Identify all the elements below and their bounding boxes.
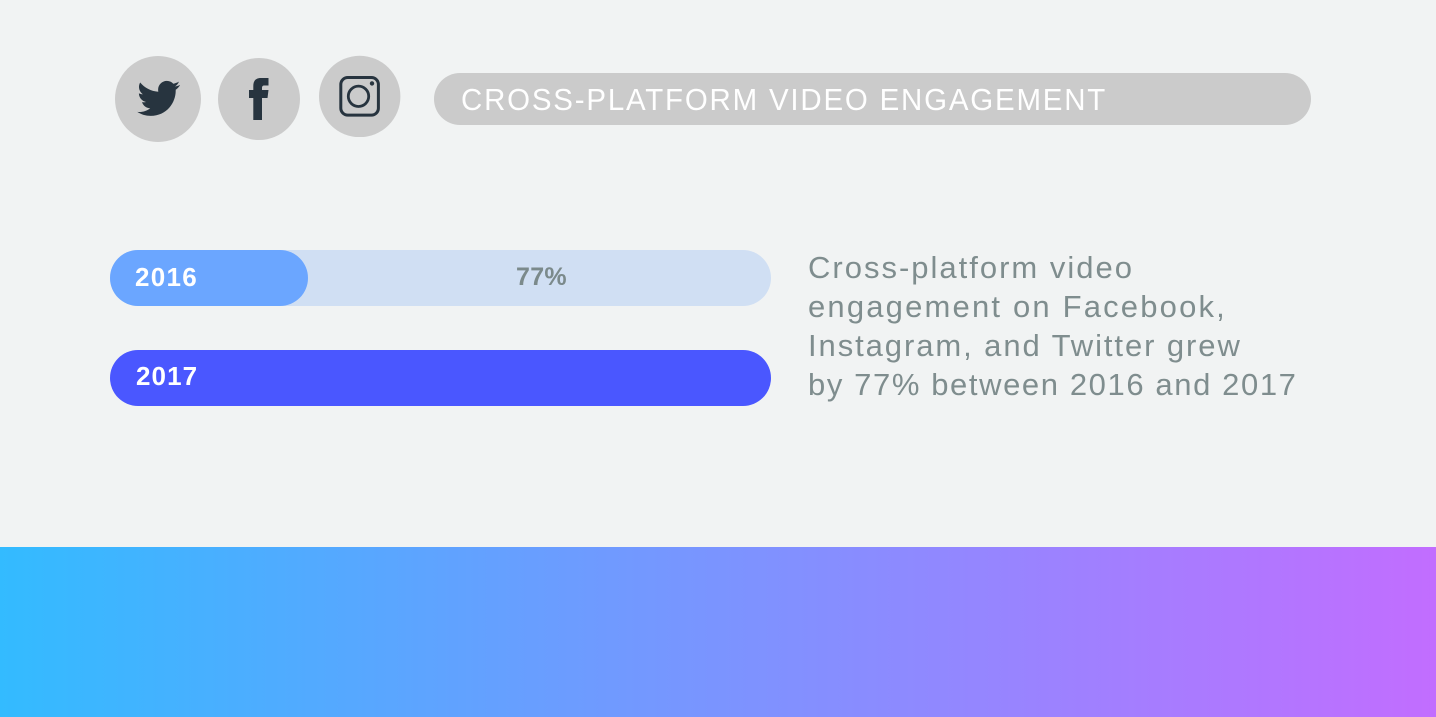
gradient band — [0, 547, 1436, 717]
bar fill: 2016 — [110, 250, 308, 306]
icon: facebook — [218, 58, 300, 140]
heading pill — [434, 73, 1311, 125]
description text — [808, 250, 1298, 402]
icon: twitter — [115, 56, 201, 142]
bar: 2017 — [110, 350, 771, 406]
label: 77%: 77% — [516, 263, 567, 291]
description text: by 77% between 2016 and 2017 — [808, 367, 1298, 402]
bar: 2016 — [110, 250, 771, 306]
label: 2016: 2016 — [135, 262, 198, 292]
heading text: CROSS-PLATFORM VIDEO ENGAGEMENT — [461, 82, 1107, 117]
label: 2017: 2017 — [136, 361, 198, 391]
description text: Instagram, and Twitter grew — [808, 328, 1242, 363]
icon: instagram — [319, 56, 400, 137]
description text: engagement on Facebook, — [808, 289, 1227, 324]
description text: Cross-platform video — [808, 250, 1134, 285]
